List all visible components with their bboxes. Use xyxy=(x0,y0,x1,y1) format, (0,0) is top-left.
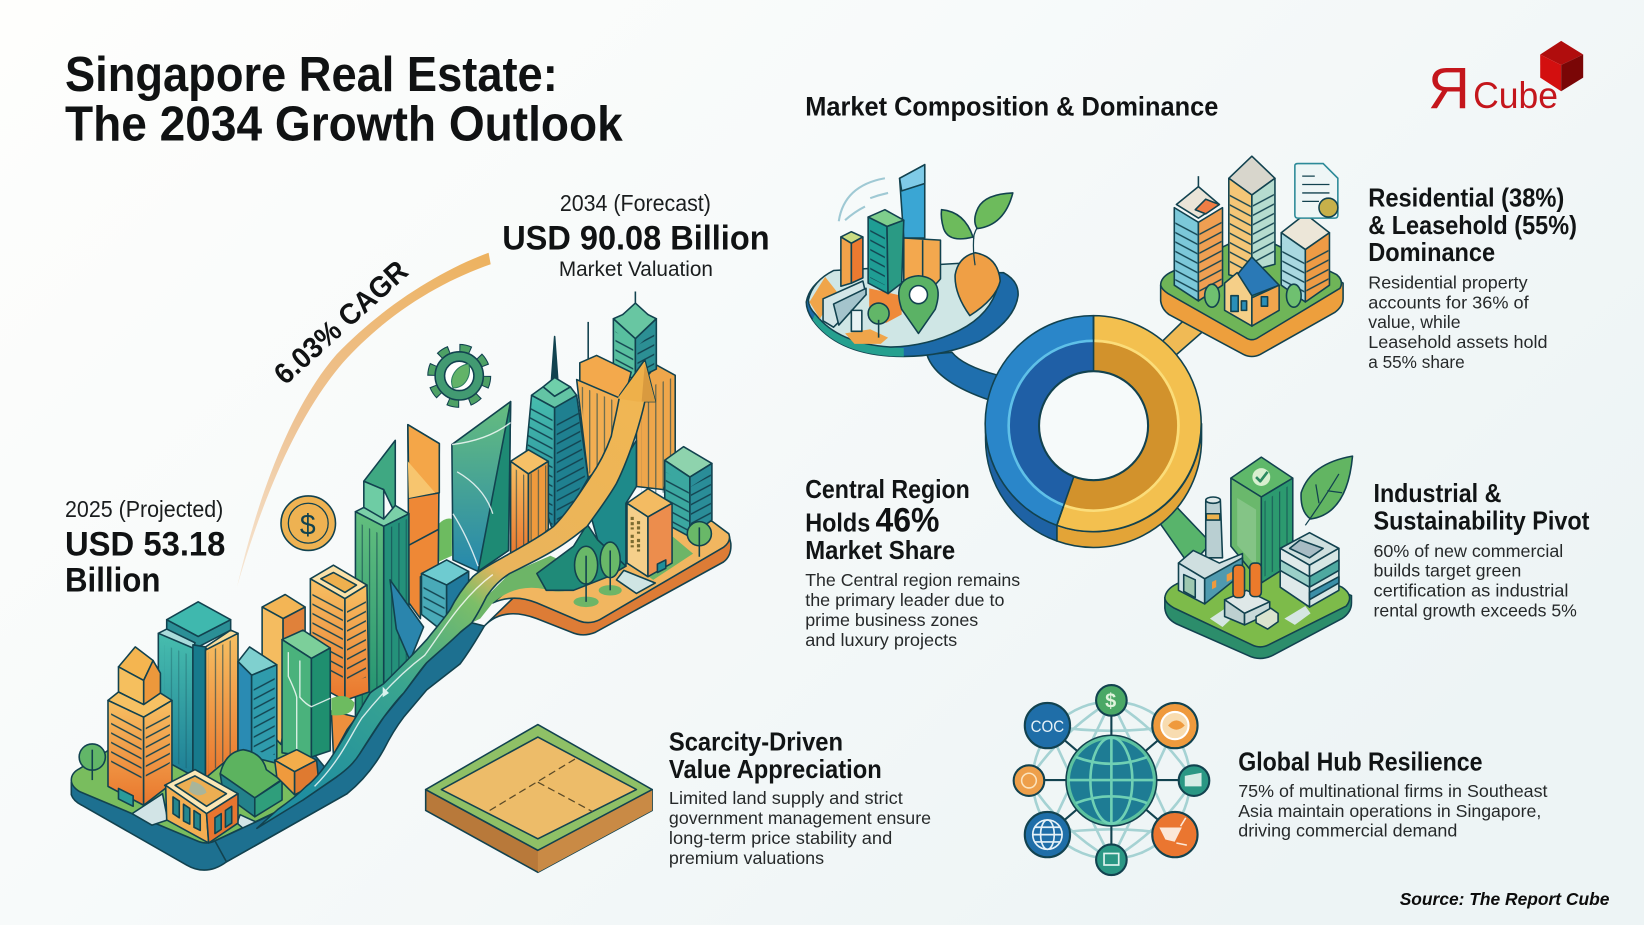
stat: 2034 forecast: 2034 (Forecast) xyxy=(560,190,711,216)
illustration: residential plate xyxy=(1161,156,1343,356)
donut depth xyxy=(986,424,1202,547)
buildings xyxy=(823,165,940,338)
rim: road edge xyxy=(215,623,484,862)
building: teal glass shard xyxy=(452,402,511,571)
text: industrial: 60% of new commercial xyxy=(1373,541,1563,561)
logo: RCube: Cube xyxy=(1473,75,1558,116)
node: clipboard xyxy=(1096,844,1127,875)
illustration: global network xyxy=(1014,685,1209,875)
building: green bush block xyxy=(220,750,282,817)
platform: left plate xyxy=(71,734,347,870)
node: map xyxy=(1152,812,1198,857)
illustration: central region plate xyxy=(806,165,1018,356)
stat: 2034 forecast: USD 90.08 Billion xyxy=(502,220,770,258)
donut chart xyxy=(927,304,1216,566)
network rings xyxy=(1029,700,1193,860)
donut hole xyxy=(1039,371,1148,480)
heading: market composition: Market Composition & Dominance xyxy=(805,90,1218,121)
wind lines xyxy=(839,178,888,221)
stat: 2025 projected: 2025 (Projected) xyxy=(65,496,223,522)
office block xyxy=(1280,533,1339,607)
building: front house xyxy=(165,770,238,843)
node: dollar: $ xyxy=(1105,691,1116,713)
arrow: growth ribbon xyxy=(257,360,655,828)
stat: 2025 projected: Billion xyxy=(65,561,160,599)
building: right teal tower xyxy=(665,447,712,537)
text: global hub xyxy=(1238,749,1548,841)
text: residential: value, while xyxy=(1368,312,1461,332)
chimney xyxy=(1206,497,1223,558)
lower box and cylinders xyxy=(1225,563,1278,629)
donut blue segment xyxy=(985,316,1094,525)
text: scarcity: premium valuations xyxy=(669,848,824,868)
location pin xyxy=(899,276,938,333)
text: residential: Dominance xyxy=(1368,239,1495,267)
building: small orange cube xyxy=(275,750,319,795)
tree: left xyxy=(79,744,105,780)
text: industrial: builds target green xyxy=(1373,561,1521,581)
building: orange mid tower xyxy=(511,450,548,558)
building: left tower xyxy=(1174,176,1223,301)
building: blue striped tower xyxy=(238,647,277,763)
building: striped orange tower xyxy=(310,565,369,755)
node: dollar xyxy=(1096,685,1127,716)
text: industrial: certification as industrial xyxy=(1373,581,1569,601)
node: orange dial xyxy=(1152,703,1198,748)
fin: blue xyxy=(390,580,424,661)
building: green tower xyxy=(355,440,409,723)
platform: right plate xyxy=(472,521,731,635)
text: global hub: driving commercial demand xyxy=(1238,821,1457,841)
building: green block xyxy=(282,630,330,757)
text: residential: Leasehold assets hold xyxy=(1368,332,1548,352)
logo: RCube: Я xyxy=(1428,56,1470,121)
building: tall tower xyxy=(1229,156,1275,281)
illustration: isometric city with growth arrow xyxy=(71,291,731,870)
stat: 2034 forecast: Market Valuation xyxy=(559,258,713,281)
text: scarcity xyxy=(669,729,931,868)
building: small orange right tower xyxy=(627,489,672,577)
text: scarcity: long-term price stability and xyxy=(669,828,892,848)
text: central region: prime business zones xyxy=(805,610,978,630)
building: right tower xyxy=(1281,214,1329,302)
stat: 2034 forecast xyxy=(502,190,770,281)
text: central region: Central Region xyxy=(805,476,970,504)
text: residential: a 55% share xyxy=(1368,352,1465,372)
icon: dollar coin xyxy=(281,496,336,550)
fruit and sprout xyxy=(955,253,1000,316)
source note: Source: The Report Cube xyxy=(1400,889,1609,909)
node: globe xyxy=(1025,812,1070,857)
text: scarcity: government management ensure xyxy=(669,808,931,828)
donut inner bands xyxy=(1009,316,1178,525)
text: scarcity: Scarcity-Driven xyxy=(669,729,843,757)
factory xyxy=(1178,550,1242,604)
text: central region: Market Share xyxy=(805,537,955,565)
building: back orange block xyxy=(262,595,305,744)
text: industrial: rental growth exceeds 5% xyxy=(1373,601,1577,621)
text: scarcity: Value Appreciation xyxy=(669,756,882,784)
text: industrial: Industrial & xyxy=(1373,480,1501,508)
spokes xyxy=(1029,700,1193,860)
node: COC: COC xyxy=(1031,717,1064,736)
building: small blue block xyxy=(421,560,469,634)
building: big orange back xyxy=(588,322,675,493)
stat: 2025 projected: USD 53.18 xyxy=(65,526,225,564)
illustration: land plot xyxy=(426,725,652,872)
text: industrial: Sustainability Pivot xyxy=(1373,507,1590,535)
icon: gear with leaf xyxy=(431,348,487,404)
text: central region xyxy=(805,476,1020,650)
connector: lower green xyxy=(1153,500,1211,566)
green tower xyxy=(1231,457,1293,583)
text: central region: Holds xyxy=(805,510,870,538)
building: orange shard xyxy=(408,425,439,619)
block: dark teal lower city xyxy=(537,524,626,590)
icon: dollar coin: $ xyxy=(300,509,316,541)
document icon xyxy=(1295,164,1338,218)
text: residential: Residential (38%) xyxy=(1368,185,1564,213)
text: central region: and luxury projects xyxy=(805,630,957,650)
building: left orange tower xyxy=(108,647,172,806)
node: chart xyxy=(1179,765,1209,796)
leaf xyxy=(1301,456,1353,525)
plate xyxy=(806,273,1018,356)
illustration: industrial plate xyxy=(1165,456,1353,658)
title xyxy=(65,47,623,152)
building: teal twin tower xyxy=(158,602,238,778)
text: central region: 46% xyxy=(875,502,939,540)
building: teal spire tower xyxy=(526,337,588,537)
house xyxy=(1225,257,1279,326)
node: left coin xyxy=(1014,765,1044,796)
title: Singapore Real Estate: xyxy=(65,47,558,102)
trees xyxy=(1205,284,1301,307)
donut gold segment xyxy=(1057,316,1201,532)
text: residential xyxy=(1368,185,1577,372)
building: teal column under arrow xyxy=(590,440,636,566)
text: residential: Residential property xyxy=(1368,272,1528,292)
building: orange roof and front wall xyxy=(577,355,631,478)
text: central region: the primary leader due to xyxy=(805,590,1005,610)
label: CAGR: 6.03% CAGR xyxy=(268,254,415,391)
growth arc xyxy=(237,253,491,587)
stat: 2025 projected xyxy=(65,496,225,599)
connector: left blue xyxy=(927,352,998,401)
text: global hub: Global Hub Resilience xyxy=(1238,749,1483,777)
building: top mint tower xyxy=(613,291,656,380)
text: industrial xyxy=(1373,480,1590,621)
trees: right plate xyxy=(575,522,711,602)
connector: right tan xyxy=(1160,304,1216,356)
text: global hub: 75% of multinational firms in Southeast xyxy=(1238,781,1548,801)
logo: RCube xyxy=(1428,41,1583,121)
globe xyxy=(1066,736,1156,826)
text: global hub: Asia maintain operations in Singapore, xyxy=(1238,801,1541,821)
bush: behind shard xyxy=(438,519,452,562)
text: central region: The Central region remains xyxy=(805,570,1020,590)
title: The 2034 Growth Outlook xyxy=(65,97,623,152)
text: scarcity: Limited land supply and strict xyxy=(669,788,903,808)
text: residential: & Leasehold (55%) xyxy=(1368,212,1577,240)
node: COC xyxy=(1025,703,1070,748)
text: residential: accounts for 36% of xyxy=(1368,292,1529,312)
